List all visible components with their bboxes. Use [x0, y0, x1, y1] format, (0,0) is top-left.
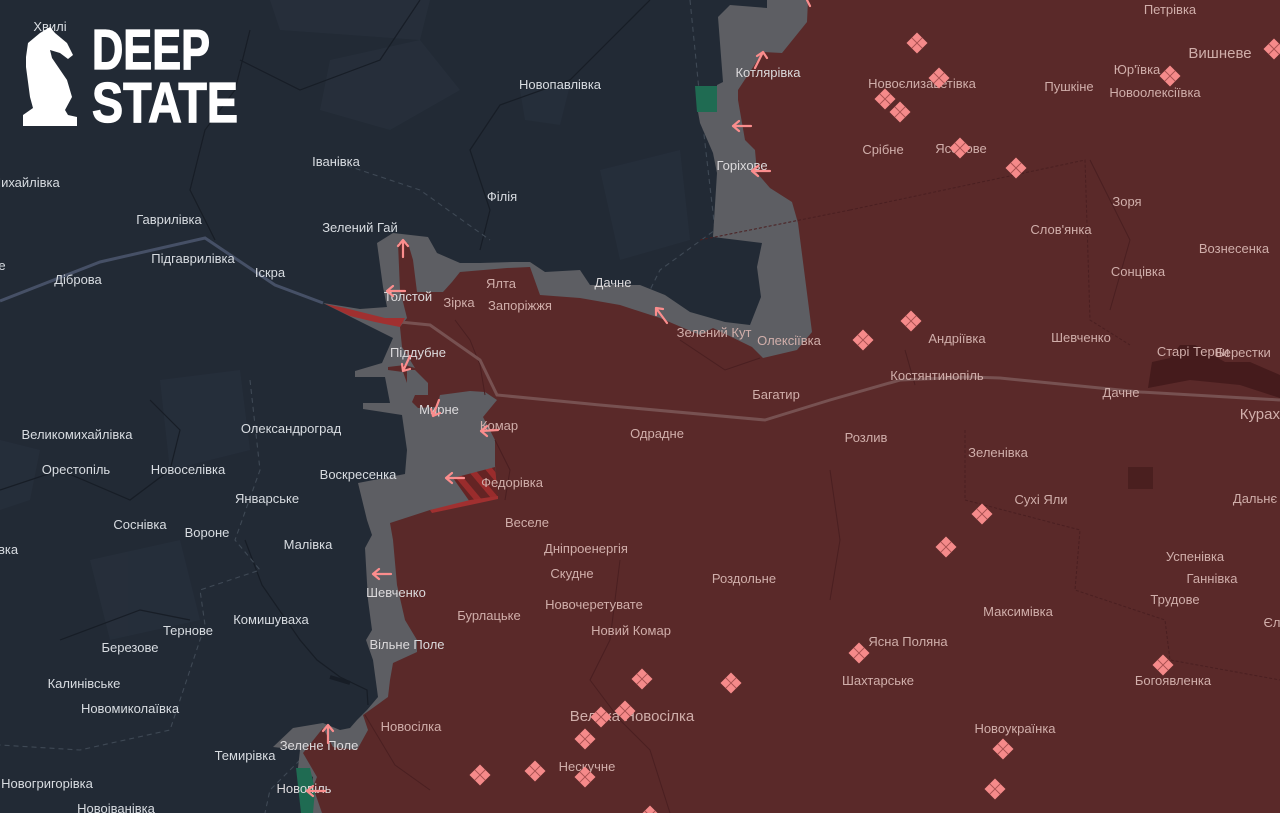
- settlement labels on the grey zone: Толстой: [384, 289, 432, 304]
- settlement labels on occupied territory: Скудне: [550, 566, 594, 581]
- settlement labels on dark territory: Новопавлівка: [519, 77, 602, 92]
- settlement labels on the grey zone: Котлярівка: [735, 65, 801, 80]
- settlement labels on occupied territory: Новочеретувате: [545, 597, 643, 612]
- settlement labels on occupied territory: Сонцівка: [1111, 264, 1166, 279]
- settlement labels on occupied territory: Ясна Поляна: [868, 634, 948, 649]
- settlement labels on dark territory: Зелений Гай: [322, 220, 398, 235]
- settlement labels on occupied territory: Бурлацьке: [457, 608, 521, 623]
- settlement labels on dark territory: Воскресенка: [320, 467, 397, 482]
- green zone: liberated areas: [296, 86, 717, 813]
- dark area in occupied territory near Berestky: [1148, 345, 1280, 398]
- settlement labels on occupied territory: Новоєлизаветівка: [868, 76, 977, 91]
- settlement labels on dark territory: Іванівка: [312, 154, 361, 169]
- settlement labels on the grey zone: Новопіль: [277, 781, 332, 796]
- settlement labels on dark territory: Гаврилівка: [136, 212, 203, 227]
- wordmark: STATE: [92, 71, 238, 135]
- settlement labels on occupied territory: Срібне: [862, 142, 904, 157]
- settlement labels on the grey zone: Вільне Поле: [369, 637, 445, 652]
- settlement labels on occupied territory: Ясенове: [935, 141, 987, 156]
- administrative borders (dashed): [0, 0, 715, 813]
- settlement labels on dark territory: Калинівське: [48, 676, 120, 691]
- settlement labels on occupied territory: [381, 2, 1280, 774]
- settlement labels on dark territory: Великомихайлівка: [21, 427, 133, 442]
- settlement labels on occupied territory: Андріївка: [928, 331, 986, 346]
- wordmark: DEEP: [92, 18, 210, 82]
- settlement labels on occupied territory: Костянтинопіль: [890, 368, 984, 383]
- settlement labels on the grey zone: Мирне: [419, 402, 459, 417]
- settlement labels on occupied territory: Новоолексіївка: [1109, 85, 1201, 100]
- rivers and borders in occupied territory: [365, 160, 1280, 813]
- settlement labels on dark territory: Орестопіль: [42, 462, 110, 477]
- settlement labels on the grey zone: Зелене Поле: [280, 738, 358, 753]
- settlement labels on occupied territory: Дачне: [1103, 385, 1139, 400]
- occupied territory: [303, 0, 1280, 813]
- settlement labels on occupied territory: Новий Комар: [591, 623, 671, 638]
- settlement labels on occupied territory: Зелений Кут: [677, 325, 751, 340]
- settlement labels on occupied territory: Новоукраїнка: [974, 721, 1056, 736]
- rivers in the unoccupied area: [0, 0, 650, 705]
- settlement labels on occupied territory: Юр'ївка: [1114, 62, 1161, 77]
- settlement labels on occupied territory: Дальнє: [1233, 491, 1277, 506]
- settlement labels on occupied territory: Пушкіне: [1044, 79, 1094, 94]
- settlement labels on occupied territory: Дніпроенергія: [544, 541, 628, 556]
- fortification markers: [470, 32, 1280, 813]
- settlement labels on occupied territory: Новосілка: [381, 719, 442, 734]
- settlement labels on dark territory: Іскра: [255, 265, 286, 280]
- settlement labels on occupied territory: Старі Терни: [1157, 344, 1229, 359]
- icon: chess knight: [23, 27, 77, 126]
- settlement labels on occupied territory: Нескучне: [559, 759, 615, 774]
- settlement labels on occupied territory: Успенівка: [1166, 549, 1225, 564]
- terrain patches: [0, 0, 690, 640]
- settlement labels on dark territory: Діброва: [54, 272, 103, 287]
- settlement labels on dark territory: Темирівка: [215, 748, 276, 763]
- settlement labels on occupied territory: Зоря: [1112, 194, 1142, 209]
- wordmark: [92, 18, 238, 135]
- settlement labels on the grey zone: Піддубне: [390, 345, 446, 360]
- settlement labels on occupied territory: Багатир: [752, 387, 800, 402]
- settlement labels on occupied territory: Розлив: [845, 430, 887, 445]
- settlement labels on the grey zone: Дачне: [595, 275, 631, 290]
- settlement labels on occupied territory: Сухі Яли: [1014, 492, 1068, 507]
- settlement labels on occupied territory: Ялта: [486, 276, 517, 291]
- settlement labels on occupied territory: Веселе: [505, 515, 549, 530]
- settlement labels on the grey zone: [277, 65, 801, 796]
- settlement labels on occupied territory: Зеленівка: [968, 445, 1029, 460]
- settlement labels on dark territory: Январське: [235, 491, 299, 506]
- settlement labels on occupied territory: Комар: [480, 418, 518, 433]
- hatched front sectors: [325, 304, 498, 513]
- settlement labels on dark territory: Олександроград: [241, 421, 342, 436]
- settlement labels on dark territory: Малівка: [284, 537, 333, 552]
- settlement labels on occupied territory: Запоріжжя: [488, 298, 552, 313]
- logo: Deep State: [23, 18, 238, 135]
- settlement labels on occupied territory: Федорівка: [481, 475, 544, 490]
- settlement labels on occupied territory: Трудове: [1150, 592, 1200, 607]
- settlement labels on occupied territory: Ганнівка: [1187, 571, 1238, 586]
- settlement labels on occupied territory: Берестки: [1215, 345, 1271, 360]
- attack direction arrows: [307, 0, 810, 796]
- settlement labels on occupied territory: Вознесенка: [1199, 241, 1270, 256]
- settlement labels on dark territory: Новоселівка: [151, 462, 226, 477]
- settlement labels on occupied territory: Зірка: [443, 295, 475, 310]
- settlement labels on occupied territory: Максимівка: [983, 604, 1054, 619]
- settlement labels on occupied territory: Олексіївка: [757, 333, 822, 348]
- darker square near Sukhi Yaly: [1128, 467, 1153, 489]
- settlement labels on occupied territory: Вишневе: [1188, 45, 1252, 62]
- settlement labels on the grey zone: Горіхове: [716, 158, 768, 173]
- settlement labels on dark territory: Хвилі: [33, 19, 67, 34]
- settlement labels on the grey zone: Шевченко: [366, 585, 426, 600]
- settlement labels on dark territory: Підгаврилівка: [151, 251, 236, 266]
- settlement labels on dark territory: Вороне: [185, 525, 229, 540]
- settlement labels on dark territory: Філія: [487, 189, 517, 204]
- settlement labels on occupied territory: Шевченко: [1051, 330, 1111, 345]
- settlement labels on occupied territory: Петрівка: [1144, 2, 1197, 17]
- settlement labels on dark territory: Комишуваха: [233, 612, 310, 627]
- settlement labels on dark territory: Тернове: [163, 623, 213, 638]
- settlement labels on occupied territory: Шахтарське: [842, 673, 914, 688]
- settlement labels on occupied territory: Одрадне: [630, 426, 684, 441]
- settlement labels on dark territory: Березове: [102, 640, 158, 655]
- settlement labels on occupied territory: Велика Новосілка: [570, 708, 695, 725]
- grey zone: contested territory: [273, 0, 830, 813]
- settlement labels on dark territory: Новомиколаївка: [81, 701, 180, 716]
- settlement labels on occupied territory: Єл: [1264, 615, 1280, 630]
- settlement labels on dark territory: [0, 19, 602, 813]
- settlement labels on occupied territory: Роздольне: [712, 571, 776, 586]
- settlement labels on occupied territory: Богоявленка: [1135, 673, 1212, 688]
- settlement labels on dark territory: Новогригорівка: [1, 776, 94, 791]
- settlement labels on dark territory: Соснівка: [113, 517, 167, 532]
- settlement labels on occupied territory: Слов'янка: [1030, 222, 1092, 237]
- main road: [0, 238, 1280, 420]
